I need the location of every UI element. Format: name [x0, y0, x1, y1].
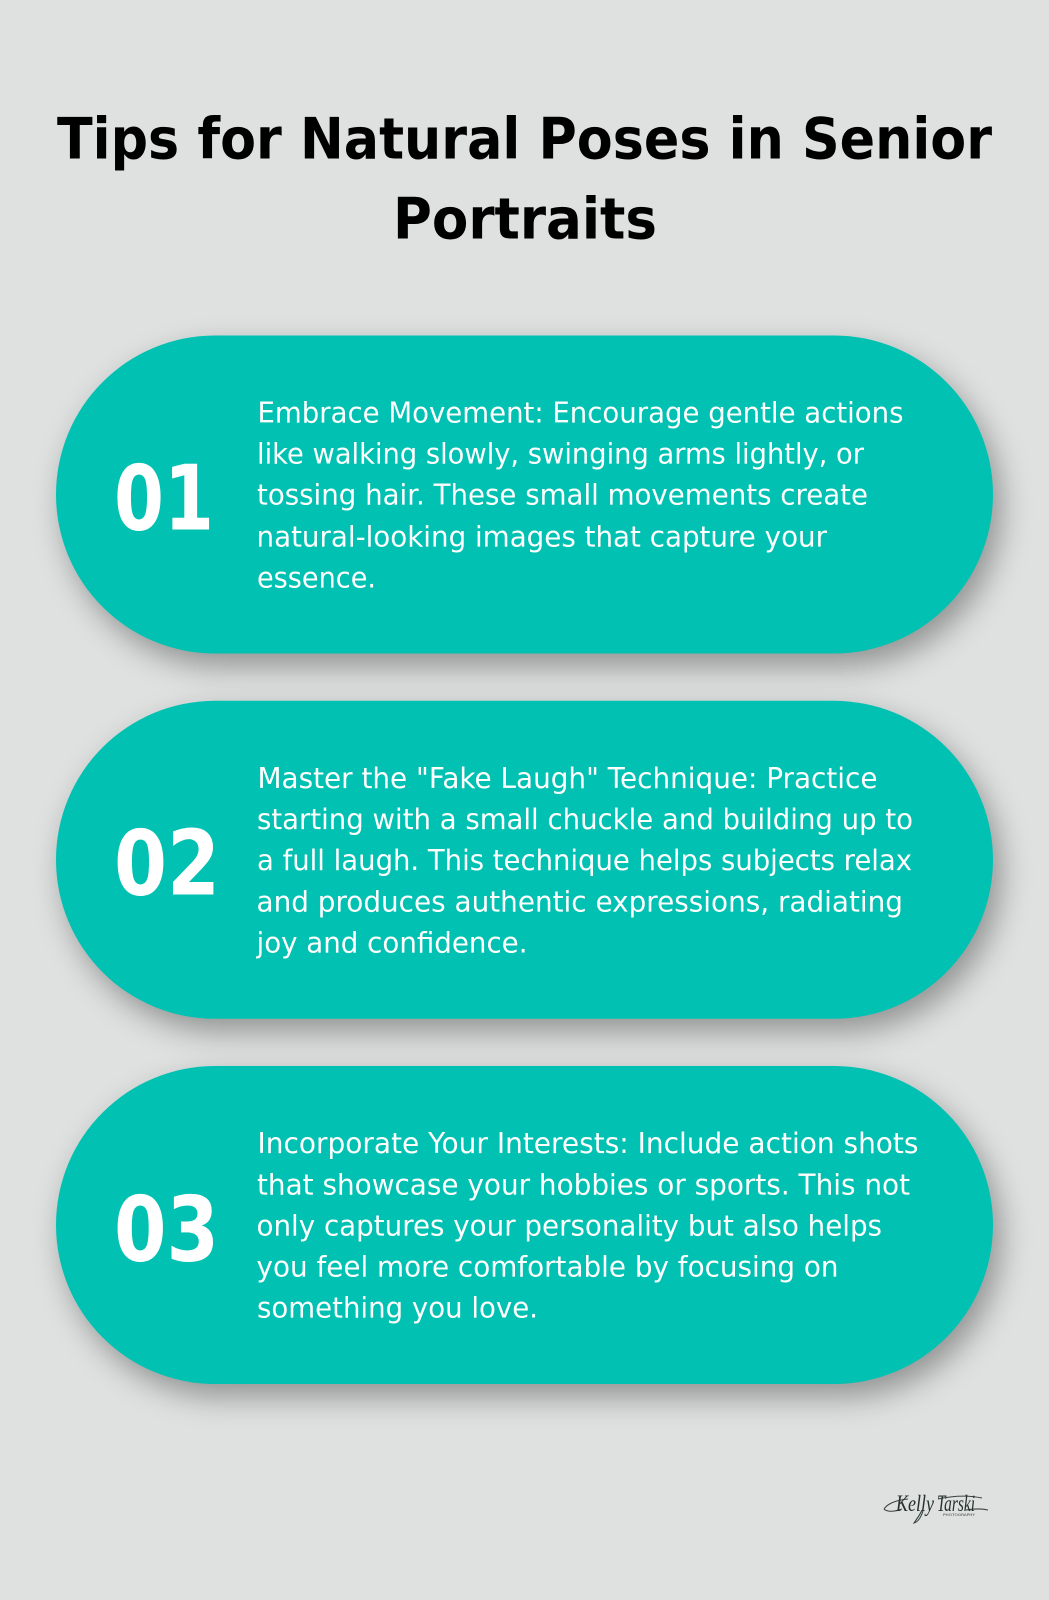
text: incorporate interests: something you love.	[257, 1291, 538, 1324]
panel: tip 01	[56, 336, 993, 654]
number 03: 03	[114, 1178, 219, 1282]
logo: signature	[884, 1491, 988, 1523]
title: Portraits	[393, 186, 657, 252]
logo: signature: Tarski	[937, 1491, 975, 1516]
text: embrace movement: natural-looking images that capture your	[256, 520, 827, 553]
text: embrace movement: Embrace Movement: Encourage gentle actions	[258, 396, 904, 429]
title: Tips for Natural Poses in Senior	[57, 106, 992, 172]
pill background 01	[56, 336, 993, 654]
text: fake laugh technique	[256, 762, 913, 959]
text: incorporate interests: that showcase your hobbies or sports. This not	[257, 1168, 910, 1201]
panel: tip 02	[56, 701, 993, 1019]
text: incorporate interests: only captures your personality but also helps	[256, 1209, 882, 1242]
logo: signature: Kelly	[895, 1491, 935, 1516]
text: embrace movement	[256, 396, 904, 594]
text: embrace movement: tossing hair. These small movements create	[257, 478, 868, 512]
text: fake laugh technique: joy and confidence.	[256, 926, 528, 959]
text: fake laugh technique: starting with a small chuckle and building up to	[257, 803, 913, 836]
text: incorporate interests: you feel more comfortable by focusing on	[256, 1250, 838, 1283]
number 02: 02	[114, 812, 220, 916]
pill background 02	[56, 701, 993, 1019]
logo: signature: PHOTOGRAPHY	[943, 1513, 976, 1517]
text: fake laugh technique: and produces authentic expressions, radiating	[256, 885, 903, 918]
title	[57, 106, 992, 252]
text: embrace movement: essence.	[257, 561, 376, 594]
number 01: 01	[114, 446, 214, 552]
text: incorporate interests: Incorporate Your Interests: Include action shots	[258, 1127, 918, 1160]
text: fake laugh technique: a full laugh. This technique helps subjects relax	[257, 844, 912, 877]
text: incorporate interests	[256, 1127, 918, 1324]
text: embrace movement: like walking slowly, swinging arms lightly, or	[257, 438, 864, 470]
text: fake laugh technique: Master the "Fake Laugh" Technique: Practice	[258, 762, 878, 795]
panel: tip 03	[56, 1066, 993, 1384]
pill background 03	[56, 1066, 993, 1384]
